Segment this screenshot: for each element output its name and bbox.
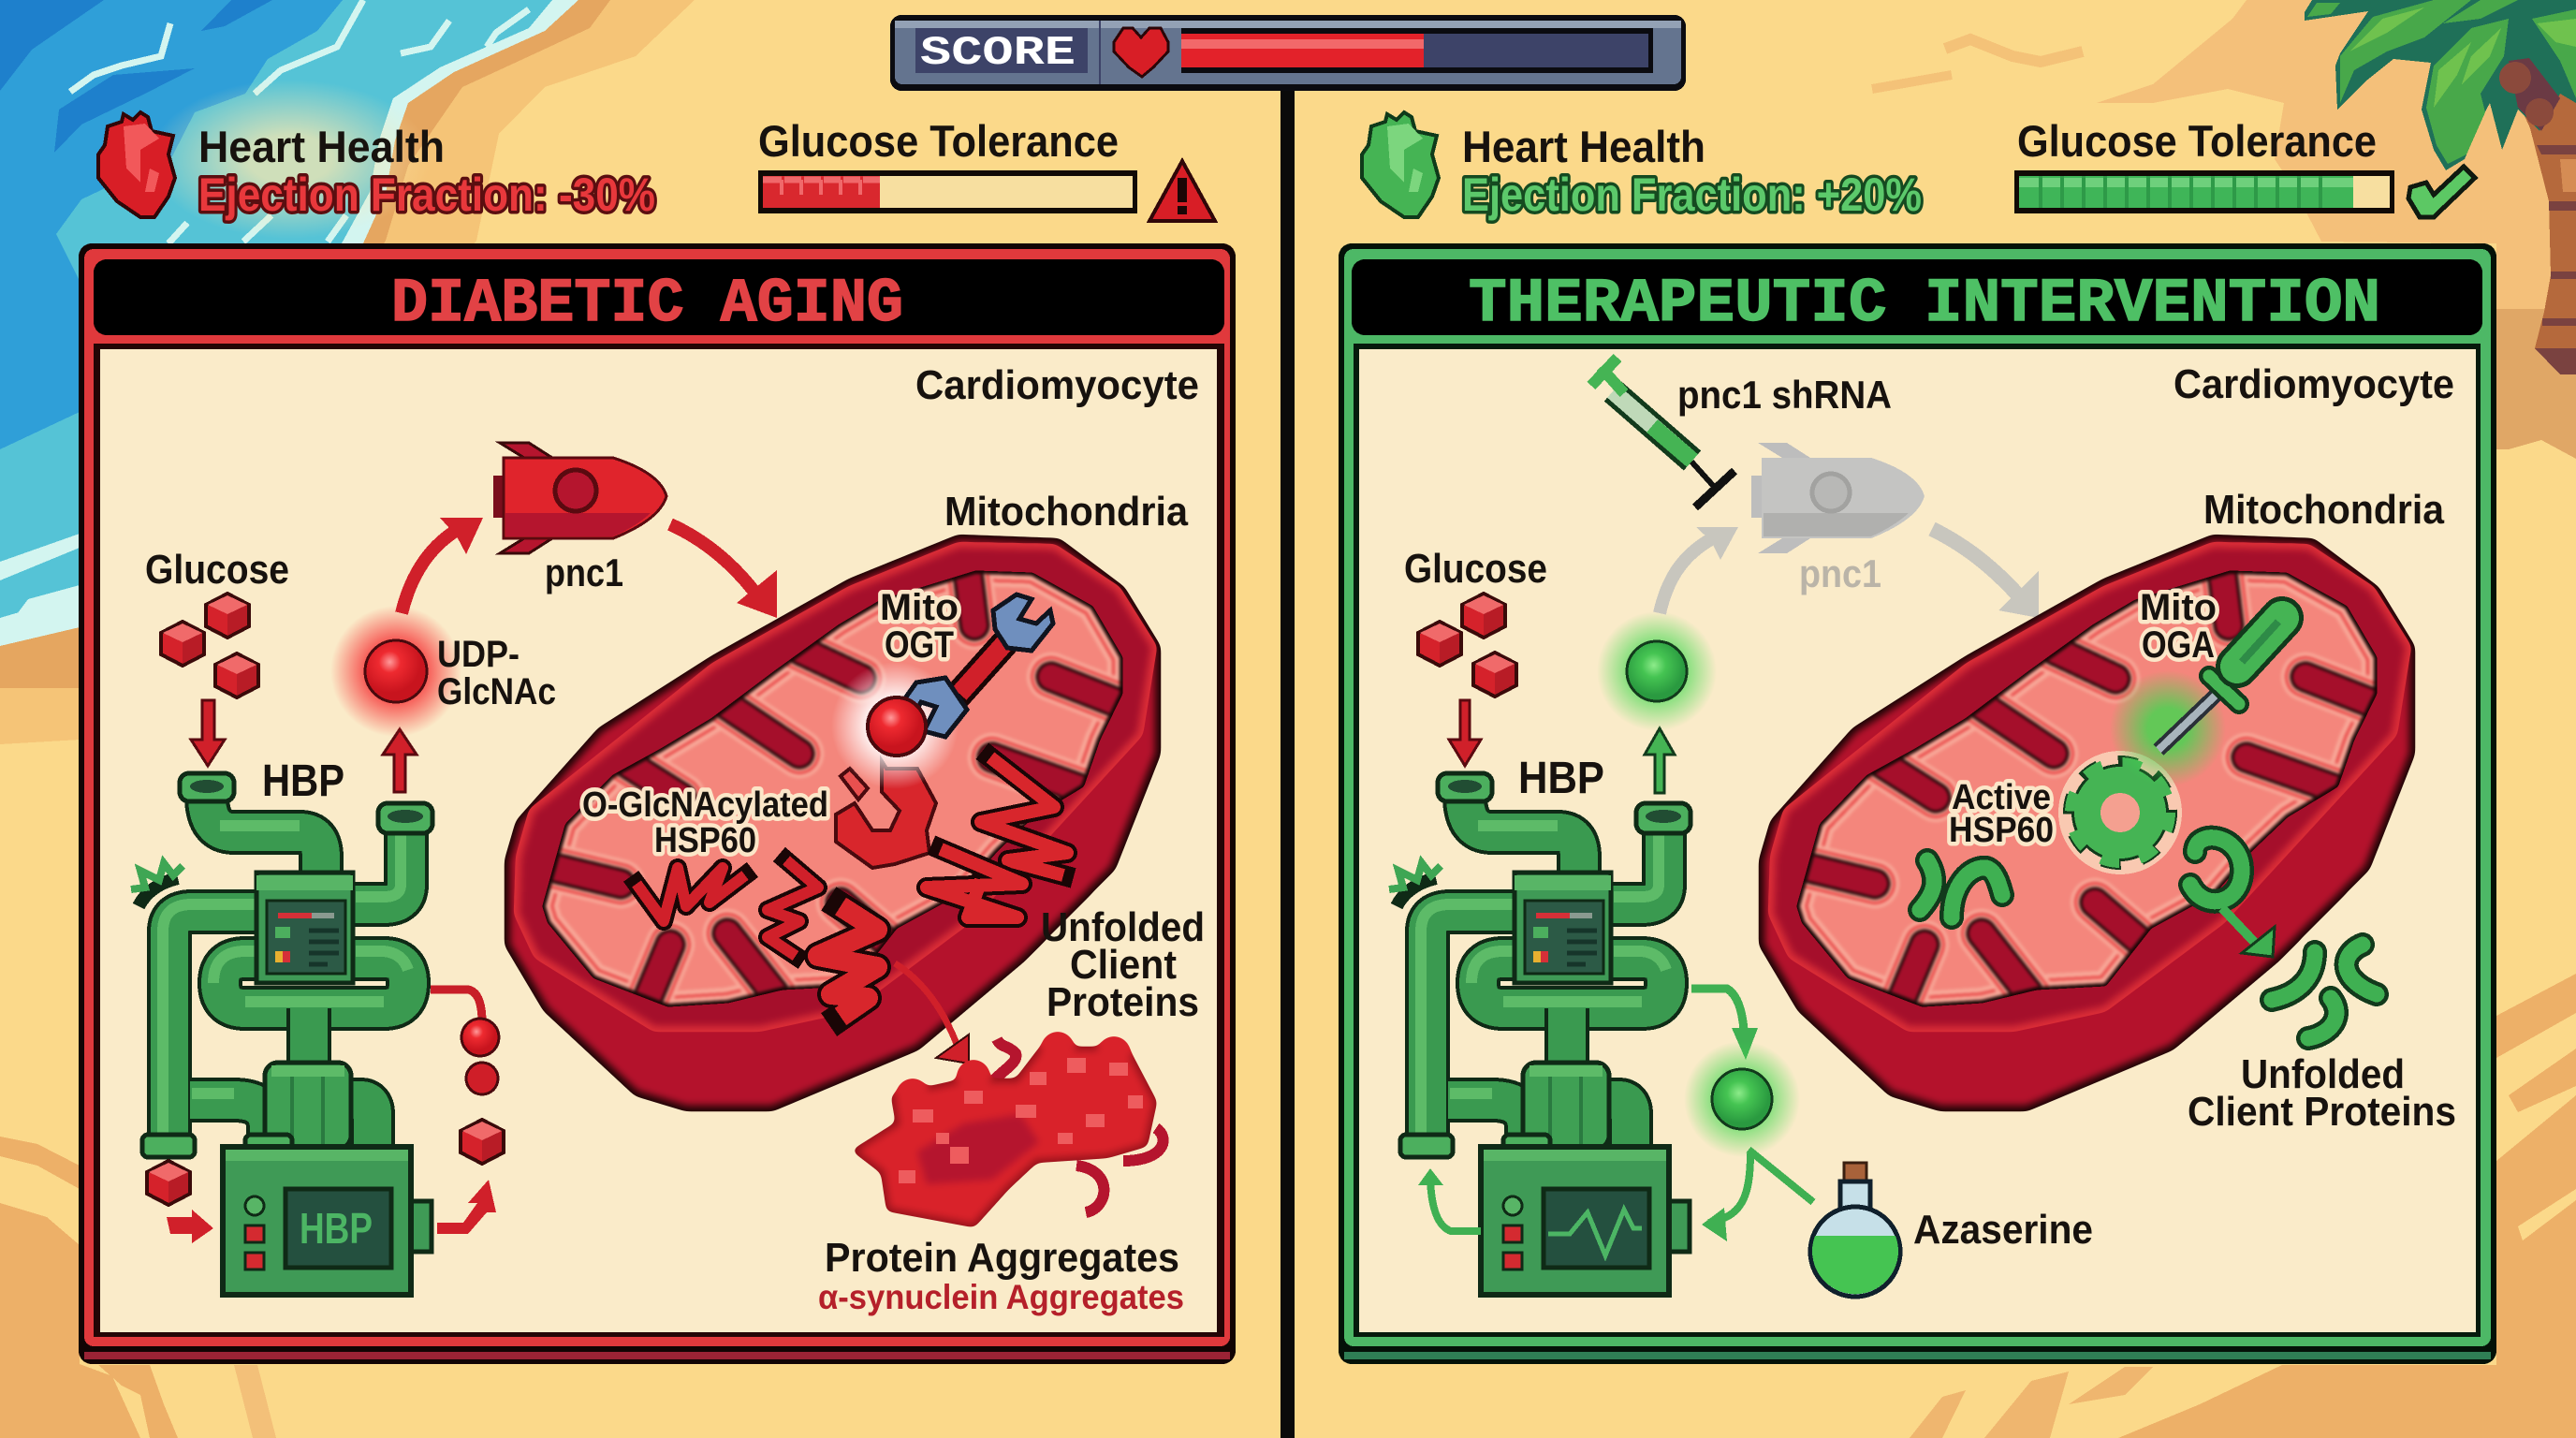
icon: glucose cubes xyxy=(161,594,258,697)
label: active HSP60: Active xyxy=(1952,778,2051,817)
icon: glucose cubes xyxy=(1418,594,1516,697)
HBP machine xyxy=(131,773,432,1295)
arrow: protein exit xyxy=(2222,908,2275,957)
right stats: heart health: Ejection Fraction: +20% xyxy=(1462,169,1922,221)
label: alpha-synuclein aggregates: α-synuclein Aggregates xyxy=(818,1278,1184,1316)
label: HBP: HBP xyxy=(1518,754,1604,803)
score bar xyxy=(890,15,1686,91)
right stats: glucose tolerance xyxy=(2014,116,2475,217)
label: cardiomyocyte: Cardiomyocyte xyxy=(2174,361,2454,407)
icon: released proteins xyxy=(2272,945,2377,1038)
icon: red heart xyxy=(98,112,175,217)
waveform on machine screen xyxy=(1548,1210,1642,1255)
sphere and arrows: azaserine branch xyxy=(1418,989,1813,1241)
label: unfolded client proteins: Unfolded xyxy=(2241,1051,2405,1097)
arrow: glucose into HBP xyxy=(191,700,225,766)
label: mito OGT xyxy=(880,587,959,666)
icon: warning xyxy=(1149,161,1215,221)
arrow: HBP to UDP-GlcNAc xyxy=(383,729,417,792)
arrow: pnc1 to mitochondria xyxy=(670,524,777,618)
label: mito OGA: Mito xyxy=(2140,587,2217,628)
arrow: HBP up xyxy=(1645,728,1675,793)
icon: OGA screwdriver xyxy=(2110,618,2282,786)
label: active HSP60 xyxy=(1949,778,2054,850)
label: mito OGT: OGT xyxy=(885,624,954,666)
icon: protein aggregates xyxy=(855,1032,1164,1225)
left stats: glucose tolerance xyxy=(758,116,1215,221)
protein: broken gear xyxy=(836,761,936,868)
mitochondrion xyxy=(507,537,1158,1108)
label: glucose: Glucose xyxy=(145,547,289,593)
panel: diabetic aging xyxy=(79,243,1236,1364)
leak: red metabolites xyxy=(147,990,504,1243)
label: mitochondria: Mitochondria xyxy=(944,489,1188,535)
HBP machine xyxy=(1389,773,1690,1295)
label: HBP: HBP xyxy=(262,756,344,806)
label: pnc1 inactive: pnc1 xyxy=(1799,551,1881,595)
arrows: inactive pathway xyxy=(1660,527,2039,618)
label: azaserine: Azaserine xyxy=(1913,1207,2093,1253)
label: pnc1: pnc1 xyxy=(545,550,623,594)
arrow: glucose into HBP xyxy=(1449,700,1481,766)
label: unfolded client proteins xyxy=(1041,904,1205,1025)
icon: pnc1 rocket xyxy=(493,443,666,553)
panel frame xyxy=(1339,243,2496,1364)
icon: O-GlcNAc ball with wrench xyxy=(831,594,1053,789)
label: UDP-GlcNAc: UDP- xyxy=(437,634,520,675)
icon: inhibited rocket xyxy=(1751,443,1925,553)
right stats: heart health: Heart Health xyxy=(1462,122,1705,171)
center divider xyxy=(1281,90,1295,1438)
icon: green heart xyxy=(1362,112,1439,217)
icon: syringe with inhibition bar xyxy=(1591,358,1734,507)
label: unfolded client proteins: Client xyxy=(1070,942,1177,988)
left stats: heart health xyxy=(98,112,655,221)
label: pnc1 shRNA: pnc1 shRNA xyxy=(1677,373,1892,417)
label: O-GlcNAcylated HSP60 xyxy=(582,785,828,860)
mitochondrion xyxy=(1762,537,2412,1108)
arrow: to pnc1 xyxy=(402,518,483,613)
label: unfolded client proteins xyxy=(2188,1051,2456,1135)
left stats: heart health: Heart Health xyxy=(198,122,445,171)
label: machine HBP: HBP xyxy=(300,1204,373,1253)
score label: SCORE xyxy=(920,30,1076,77)
icon: active HSP60 gear xyxy=(2058,751,2182,874)
label: unfolded client proteins: Client Proteins xyxy=(2188,1089,2456,1135)
label: unfolded client proteins: Proteins xyxy=(1046,979,1199,1025)
icon: score heart xyxy=(1114,28,1168,77)
unfolded proteins xyxy=(637,757,1067,1017)
right stats: glucose tolerance: Glucose Tolerance xyxy=(2017,116,2377,166)
glucose bar xyxy=(2014,170,2394,213)
sphere: green UDP-GlcNAc xyxy=(1597,611,1717,731)
panel: therapeutic intervention xyxy=(1339,243,2496,1364)
label: mito OGA: OGA xyxy=(2142,624,2215,666)
right stats: heart health xyxy=(1362,112,1922,221)
label: cardiomyocyte: Cardiomyocyte xyxy=(915,362,1199,408)
score meter xyxy=(1181,28,1653,73)
glucose bar xyxy=(758,170,1137,213)
label: mito OGA xyxy=(2140,587,2217,666)
label: glucose: Glucose xyxy=(1404,546,1547,592)
left stats: heart health: Ejection Fraction: -30% xyxy=(198,169,655,221)
title: THERAPEUTIC INTERVENTION xyxy=(1469,269,2380,339)
left stats: glucose tolerance: Glucose Tolerance xyxy=(758,116,1119,166)
palm tree xyxy=(2305,0,2576,374)
label: UDP-GlcNAc xyxy=(437,634,556,712)
background: ocean and shoreline xyxy=(0,0,695,744)
label: mitochondria: Mitochondria xyxy=(2203,487,2444,533)
label: unfolded client proteins: Unfolded xyxy=(1041,904,1205,950)
icon: azaserine flask xyxy=(1810,1163,1900,1297)
label: O-GlcNAcylated HSP60: HSP60 xyxy=(654,821,756,860)
label: mito OGT: Mito xyxy=(880,587,959,628)
label: active HSP60: HSP60 xyxy=(1949,811,2054,850)
refolded proteins xyxy=(1920,838,2242,917)
title: DIABETIC AGING xyxy=(391,269,903,339)
icon: check xyxy=(2408,167,2475,217)
sphere: UDP-GlcNAc xyxy=(330,606,461,737)
arrow: out to aggregates xyxy=(895,963,969,1064)
label: protein aggregates: Protein Aggregates xyxy=(825,1235,1179,1281)
label: UDP-GlcNAc: GlcNAc xyxy=(437,671,556,712)
panel frame xyxy=(79,243,1236,1364)
label: O-GlcNAcylated HSP60: O-GlcNAcylated xyxy=(582,785,828,825)
